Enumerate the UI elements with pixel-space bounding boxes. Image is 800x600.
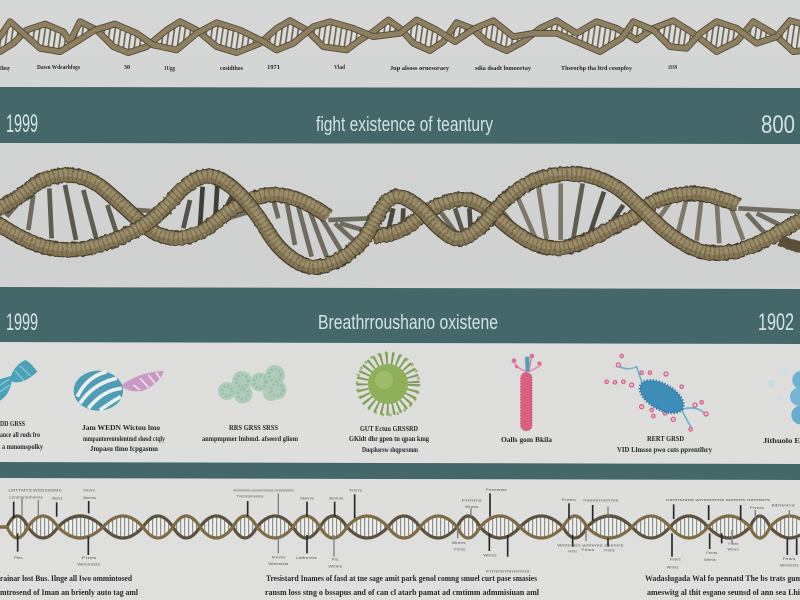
bottom annotated DNA helix — [0, 487, 800, 573]
annotation labels: Mmnrrs — [772, 503, 795, 508]
icon: green virus — [357, 353, 419, 415]
banner: third thin band — [0, 462, 800, 480]
annotation labels: Wrmrs — [452, 540, 466, 545]
annotation labels: Letfrmnrs — [296, 555, 317, 560]
annotation labels: Wrmmrsrs — [268, 561, 288, 566]
top timeline captions: cosidthos — [220, 65, 243, 72]
annotation labels: Fmrrs — [349, 488, 362, 493]
top timeline captions: Vlad — [334, 64, 345, 71]
top timeline captions: Dawn Wdearhfogs — [37, 64, 80, 71]
band title: fight existence of teantury — [316, 114, 493, 136]
annotation labels: Frmrsrmmrrmrs — [486, 568, 530, 573]
banner: second heading band — [0, 287, 800, 344]
icon: striped DNA ball with pink tail — [74, 371, 164, 411]
top timeline captions: Jup alsoss ornesoraey — [390, 65, 450, 72]
top timeline captions: 30 — [124, 64, 130, 71]
icon captions: ance all ruds fro — [0, 431, 40, 439]
icon captions: a mmomspolky — [2, 443, 43, 451]
annotation labels — [8, 487, 799, 573]
icon captions: DD GRSS — [0, 420, 25, 428]
icon captions: Jithuolo E — [763, 437, 800, 445]
annotation labels: Wrmrs — [667, 564, 678, 569]
annotation labels: Frmrrs — [462, 498, 482, 503]
top timeline captions: Thsrorhp tha ltrd cosnpfoy — [561, 65, 633, 72]
top timeline captions: 1SS9 — [668, 64, 677, 71]
icon captions: VID Llmsso pwo cuts pprentlhry — [617, 446, 712, 454]
band title: Breathrroushano oxistene — [318, 312, 498, 334]
text block: left paragraph: rainar lost Bus. Ilnge all Iwo ommintosed — [0, 573, 132, 583]
annotation labels: Frs — [332, 557, 338, 562]
annotation labels: Wrmrs — [704, 557, 716, 562]
annotation labels: LMTTMTS WSSSSSMS — [8, 488, 62, 493]
icon: blue bacterium with pink particles — [605, 354, 708, 431]
annotation labels: Frmrs — [783, 556, 795, 561]
icon captions: RERT GRSD — [647, 435, 684, 443]
icon captions: GKldt dhr gpen tn qpan kmg — [349, 435, 429, 443]
annotation labels: Tmrsmrrmmms — [237, 493, 263, 498]
annotation labels: Frmrs — [670, 557, 681, 562]
annotation labels: Frmrs — [706, 550, 717, 555]
annotation labels: Sbmnrs — [300, 496, 314, 501]
top timeline captions: sdia dsadt lomoortay — [475, 65, 532, 72]
icon: pink rod with frayed top — [512, 354, 542, 431]
large central DNA helix — [0, 172, 800, 267]
icon: blue blob at right edge — [767, 368, 800, 424]
top timeline captions: Ilony — [0, 65, 11, 72]
banner: first heading band — [0, 87, 800, 144]
band year left: 1999 — [6, 110, 38, 138]
annotation labels: mmmrrmrrmrs — [583, 498, 618, 503]
annotation labels: Frmrs — [454, 547, 465, 552]
annotation labels: Phrs — [14, 555, 23, 560]
annotation labels: Frmrs — [568, 548, 577, 553]
text block: centre paragraph: Tresistard Inames of fasd at tne sage amit park genol comng smuel curt pase smasies — [266, 573, 538, 583]
annotation labels: mmrrsnms wrrsmmms smmrrs nmmsrrs — [666, 497, 770, 502]
icon: green cell cluster — [218, 365, 286, 404]
icon captions: RRS GRSS SRSS — [229, 424, 278, 432]
text block: left paragraph: mtrosend of Iman an brienly auto tag aml — [0, 587, 139, 597]
icon captions: Oalls gom Bkila — [501, 435, 552, 444]
annotation labels: Fmrrs — [83, 488, 95, 493]
top timeline captions: 1971 — [267, 64, 280, 71]
annotation tick lines — [14, 493, 797, 557]
annotation labels: Frnrs — [82, 555, 96, 560]
annotation labels: Frmrs — [604, 548, 615, 553]
annotation labels: Sbmrs — [52, 496, 62, 501]
annotation labels: Lsmmmrrmmms — [9, 494, 43, 499]
annotation labels: Frmrs — [562, 497, 576, 502]
icon captions: mmpantorentolentmd shesd ctqly — [83, 435, 165, 443]
panel: discovery icons row — [0, 353, 800, 454]
text block: right paragraph — [645, 573, 800, 597]
annotation labels: Frmrs — [750, 505, 764, 510]
icon captions: Jmpasu tlmo fcpgasmn — [90, 445, 158, 453]
annotation labels: Wrmrs — [483, 552, 497, 557]
annotation labels: Wrmrs — [727, 547, 739, 552]
annotation labels: Wrmrrsrs wrmmrs smmrrs — [557, 542, 623, 547]
top DNA helix strip — [0, 20, 800, 53]
icon captions: Jam WEDN Wictou lmo — [82, 424, 161, 432]
annotation labels: Bmrnrs — [329, 496, 343, 501]
icon: blue helix fragment — [0, 360, 37, 401]
annotation labels: Bmmrs — [83, 495, 96, 500]
text block: left paragraph — [0, 573, 139, 597]
text block: centre paragraph: ransm loss stng o bssapus and of can cl atarb pamat ad cmtimm admmisiuan aml — [265, 587, 540, 597]
band year left: 1999 — [6, 309, 38, 336]
annotation labels: Wrmrrsrs — [780, 562, 799, 567]
annotation labels: Frmnrs — [272, 554, 286, 559]
text block: centre paragraph — [265, 573, 540, 597]
icon captions — [0, 420, 800, 454]
icon captions: anmpmpmer lmbmd. afseerd gliom — [202, 435, 298, 443]
icon captions: GUT Ectuu GRSSRD — [360, 425, 418, 433]
icon captions: Duqshsrsw shqpsrsmm — [362, 446, 418, 454]
annotation labels: Wrmrs — [465, 504, 478, 509]
annotation labels: Frmmrrsrs — [486, 487, 507, 492]
annotation labels: Fr Wrmrs — [728, 541, 738, 546]
annotation labels: Wrmrs — [328, 563, 342, 568]
annotation labels: mmmmnrrs wsrnrmmmms smmrsnmms — [233, 488, 294, 493]
top timeline captions: 1Ugg — [164, 65, 176, 72]
annotation labels: Wrmmrsrs — [77, 562, 100, 567]
annotation labels: Frmrs — [582, 547, 594, 552]
top timeline captions — [0, 64, 677, 72]
